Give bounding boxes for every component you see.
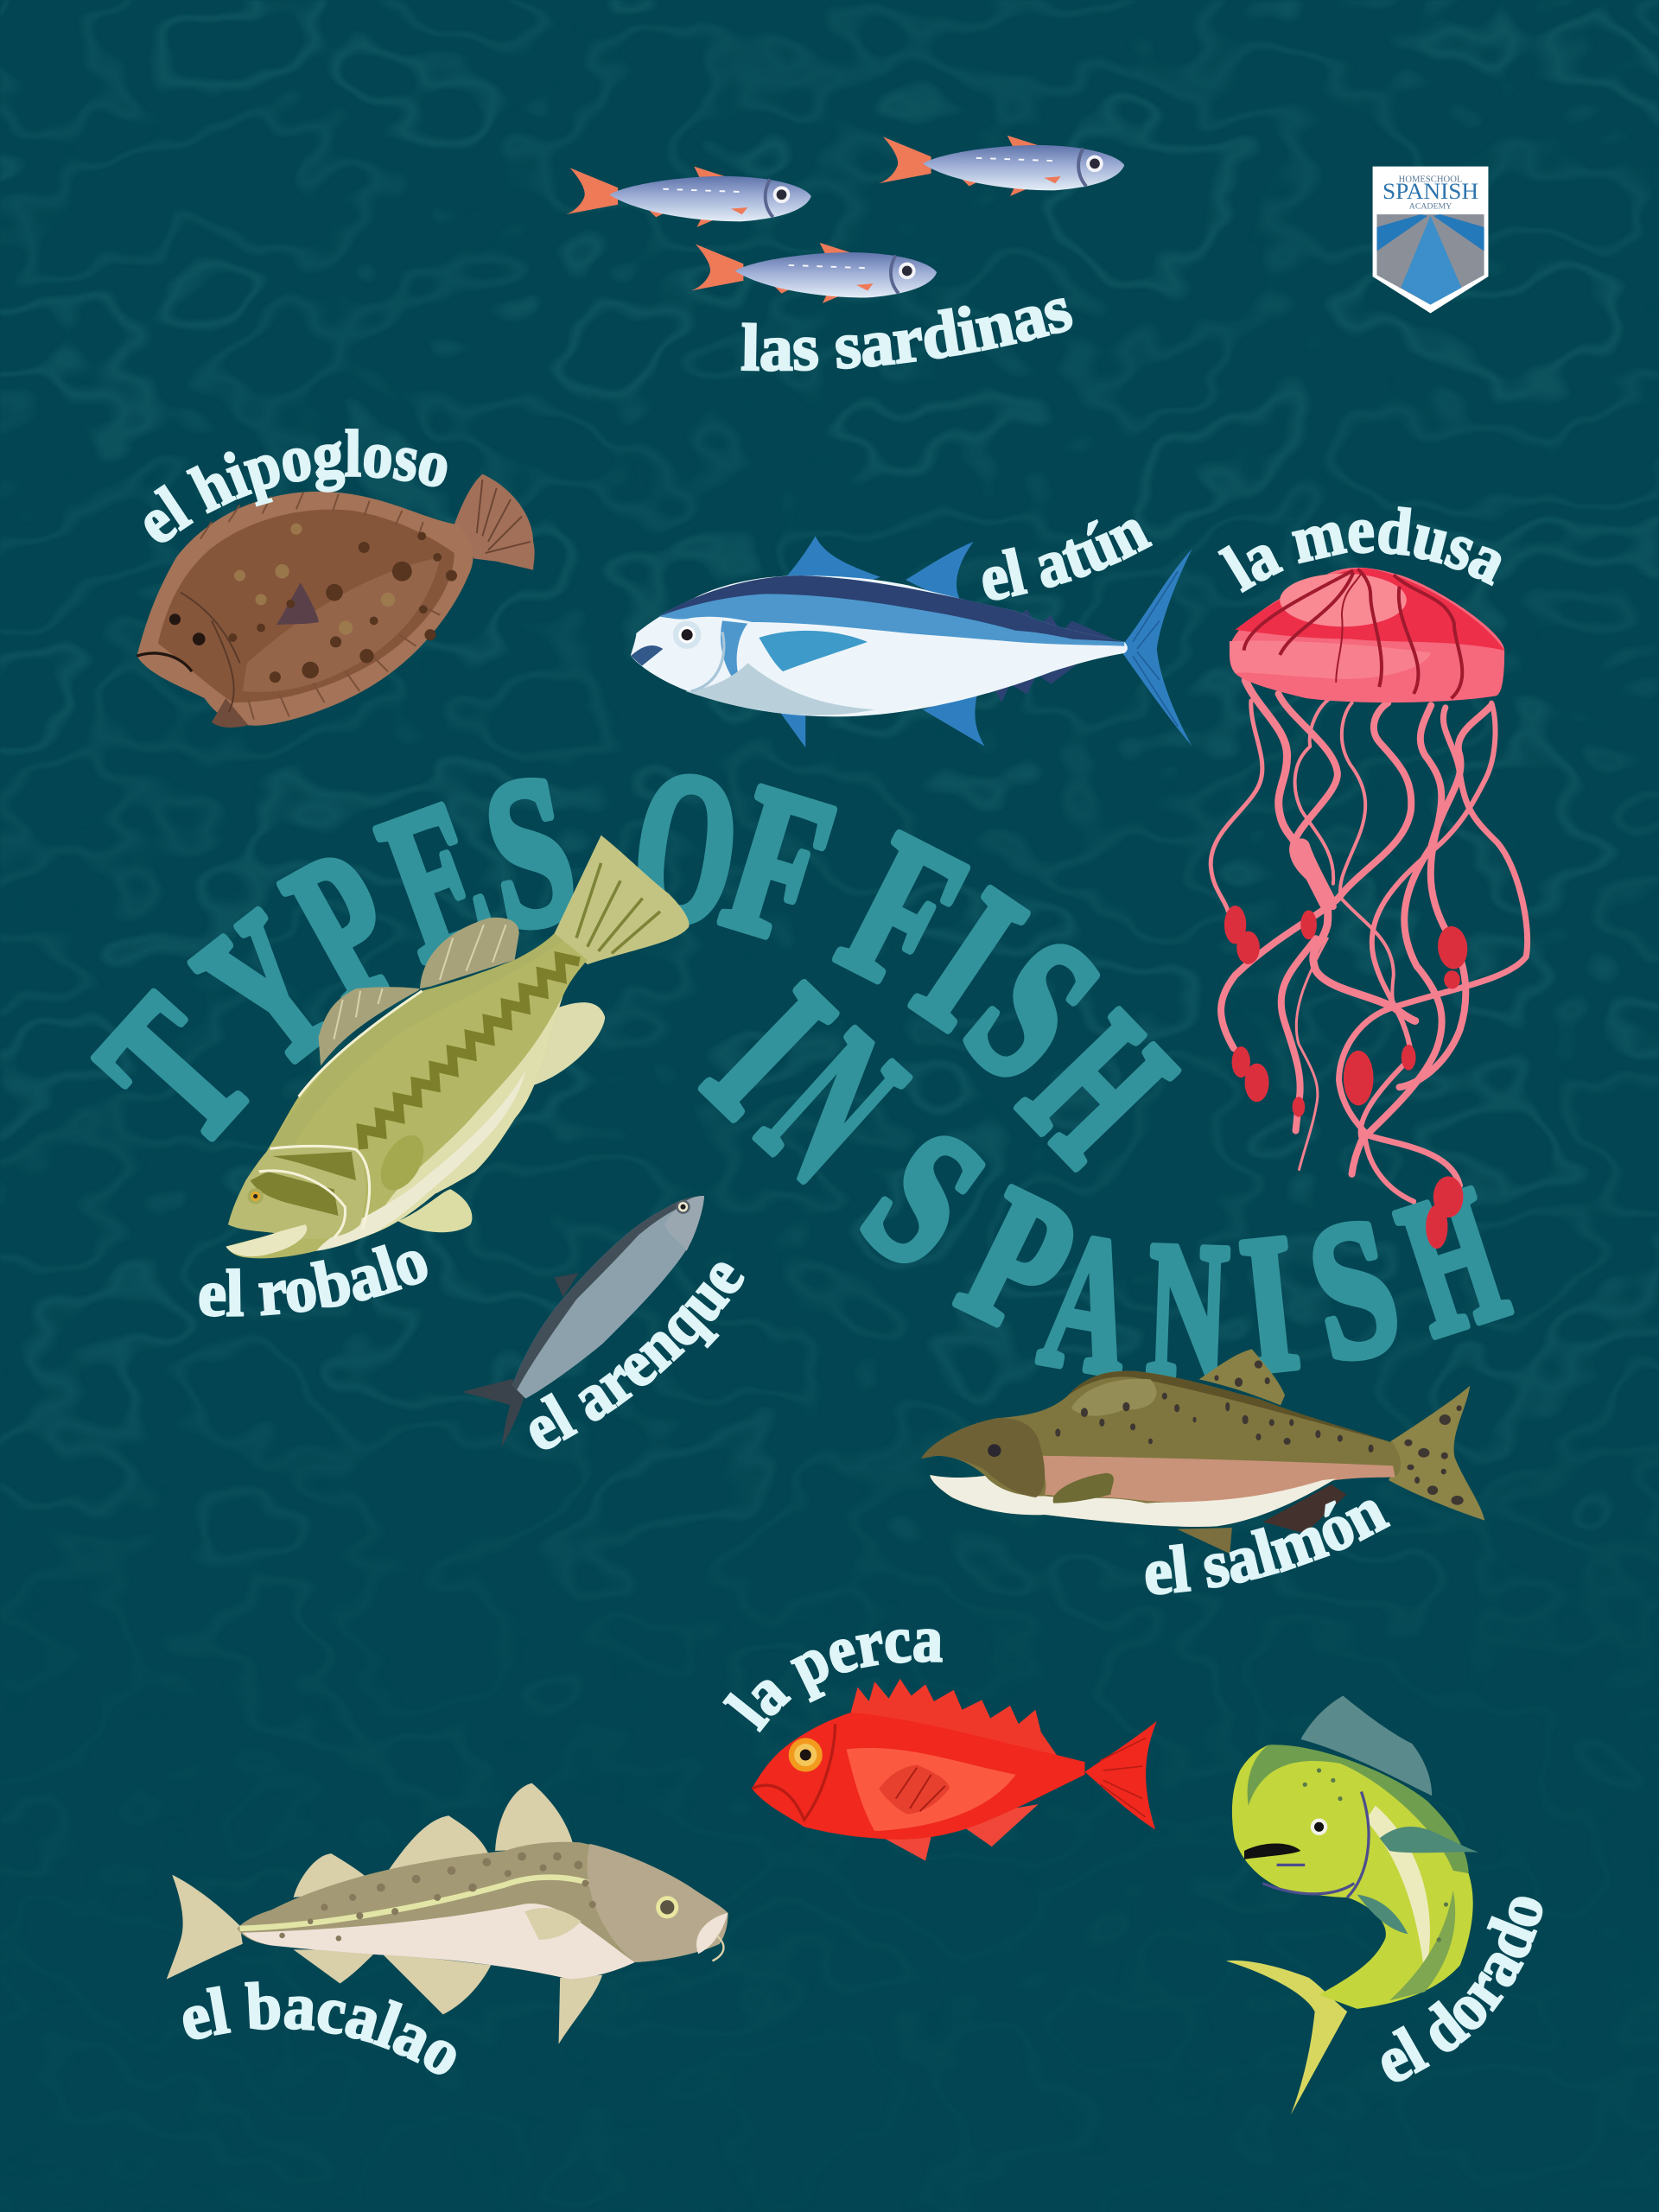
- title: Types of Fish in Spanish: H: [1379, 1147, 1526, 1376]
- title: Types of Fish in Spanish: S: [1294, 1177, 1414, 1402]
- label: el bacalao: el bacalao: [183, 1981, 456, 2075]
- fish: el arenque (herring): [461, 1196, 704, 1447]
- title: Types of Fish in Spanish: [57, 724, 1526, 1420]
- label: el dorado: el dorado: [1382, 1897, 1543, 2082]
- label: el arenque: el arenque: [530, 1262, 745, 1450]
- title: Types of Fish in Spanish: F: [811, 790, 995, 1037]
- title: Types of Fish in Spanish: P: [254, 805, 435, 1048]
- fish: el robalo (bass): [226, 836, 690, 1258]
- title: Types of Fish in Spanish: I: [665, 944, 874, 1157]
- title: Types of Fish in Spanish: I: [1233, 1194, 1306, 1413]
- label: el robalo: el robalo: [199, 1244, 428, 1317]
- label: las sardinas: las sardinas: [741, 297, 1073, 372]
- title: Types of Fish in Spanish: F: [703, 741, 855, 990]
- fish: el atun (tuna): [631, 536, 1192, 747]
- fish: el dorado: [1226, 1695, 1478, 2114]
- logo: Homeschool Spanish Academy: ACADEMY: [1409, 202, 1452, 212]
- fish: la perca: [752, 1679, 1157, 1860]
- label: el salmon: el salmón: [1146, 1500, 1391, 1595]
- label: la perca: la perca: [722, 1629, 943, 1733]
- title: Types of Fish in Spanish: O: [620, 724, 751, 970]
- title: Types of Fish in Spanish: T: [57, 958, 294, 1185]
- fish: el salmon: [921, 1349, 1484, 1554]
- title: Types of Fish in Spanish: P: [934, 1147, 1103, 1376]
- title: Types of Fish in Spanish: S: [928, 894, 1138, 1124]
- title: Types of Fish in Spanish: I: [881, 847, 1058, 1071]
- water background: [0, 0, 1659, 1533]
- fish: sardines: [566, 136, 1124, 303]
- logo: Homeschool Spanish Academy: SPANISH: [1382, 179, 1478, 204]
- title: Types of Fish in Spanish: N: [722, 989, 944, 1224]
- label: el hipogloso: el hipogloso: [144, 429, 448, 543]
- title: Types of Fish in Spanish: E: [357, 755, 517, 1005]
- logo: Homeschool Spanish Academy: HOMESCHOOL: [1399, 175, 1462, 185]
- title: Types of Fish in Spanish: S: [830, 1089, 1020, 1308]
- title: Types of Fish in Spanish: Y: [158, 869, 375, 1111]
- fish: el bacalao (cod): [167, 1783, 728, 2044]
- logo: Homeschool Spanish Academy: [1373, 167, 1488, 313]
- fish: el hipogloso (flounder): [137, 474, 535, 728]
- label: la medusa: la medusa: [1217, 506, 1502, 593]
- title: Types of Fish in Spanish: S: [469, 730, 591, 975]
- title: Types of Fish in Spanish: N: [1145, 1203, 1231, 1420]
- jellyfish: la medusa: [1211, 568, 1528, 1249]
- label: el atun: el atún: [982, 518, 1153, 601]
- title: Types of Fish in Spanish: H: [983, 974, 1215, 1202]
- title: Types of Fish in Spanish: A: [1029, 1191, 1149, 1417]
